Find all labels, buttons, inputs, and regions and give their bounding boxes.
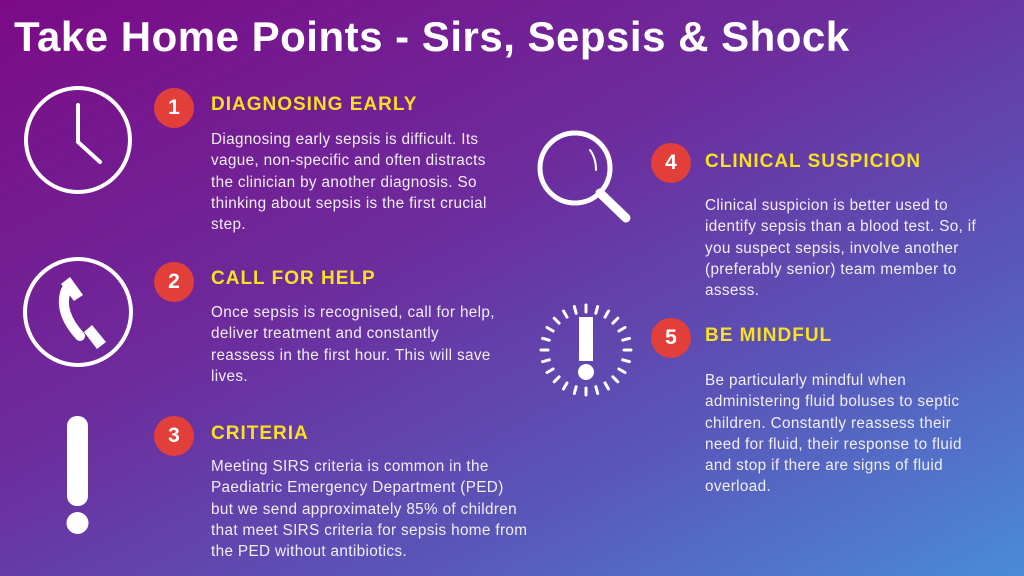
text: step.	[211, 216, 246, 233]
text: Paediatric Emergency Department (PED)	[211, 479, 504, 496]
text: 3	[168, 424, 180, 447]
text: 1	[168, 96, 180, 119]
icon: exclamation	[66, 416, 88, 534]
text: CRITERIA	[211, 423, 309, 444]
text: need for fluid, their response to fluid	[705, 436, 962, 453]
point 4	[651, 143, 976, 299]
text: administering fluid boluses to septic	[705, 393, 959, 410]
text: reassess in the first hour. This will save	[211, 347, 491, 364]
text: DIAGNOSING EARLY	[211, 94, 417, 115]
text: Once sepsis is recognised, call for help,	[211, 304, 495, 321]
point 3	[154, 416, 527, 560]
text: Meeting SIRS criteria is common in the	[211, 458, 489, 475]
text: that meet SIRS criteria for sepsis home from	[211, 522, 527, 539]
text: 5	[665, 326, 677, 349]
icon: phone	[25, 259, 131, 365]
icon: clock	[26, 88, 130, 192]
point 2	[154, 262, 495, 385]
text: identify sepsis than a blood test. So, if	[705, 218, 976, 235]
text: children. Constantly reassess their	[705, 415, 951, 432]
text: (preferably senior) team member to	[705, 261, 957, 278]
text: you suspect sepsis, involve another	[705, 240, 959, 257]
text: deliver treatment and constantly	[211, 325, 439, 342]
text: Clinical suspicion is better used to	[705, 197, 948, 214]
icon: magnifier	[540, 133, 626, 218]
text: CLINICAL SUSPICION	[705, 151, 921, 172]
text: Be particularly mindful when	[705, 372, 906, 389]
text: the clinician by another diagnosis. So	[211, 174, 477, 191]
text: the PED without antibiotics.	[211, 543, 407, 560]
text: and stop if there are signs of fluid	[705, 457, 943, 474]
point 5	[651, 318, 962, 495]
text: lives.	[211, 368, 248, 385]
text: thinking about sepsis is the first crucial	[211, 195, 487, 212]
title: Take Home Points - Sirs, Sepsis & Shock	[14, 13, 850, 60]
icon: alert burst	[541, 305, 631, 395]
text: vague, non-specific and often distracts	[211, 152, 486, 169]
text: CALL FOR HELP	[211, 268, 376, 289]
text: 2	[168, 270, 180, 293]
point 1	[154, 88, 487, 233]
text: overload.	[705, 478, 771, 495]
text: Diagnosing early sepsis is difficult. Its	[211, 131, 478, 148]
text: assess.	[705, 282, 759, 299]
text: 4	[665, 151, 677, 174]
text: BE MINDFUL	[705, 325, 832, 346]
text: but we send approximately 85% of children	[211, 501, 517, 518]
